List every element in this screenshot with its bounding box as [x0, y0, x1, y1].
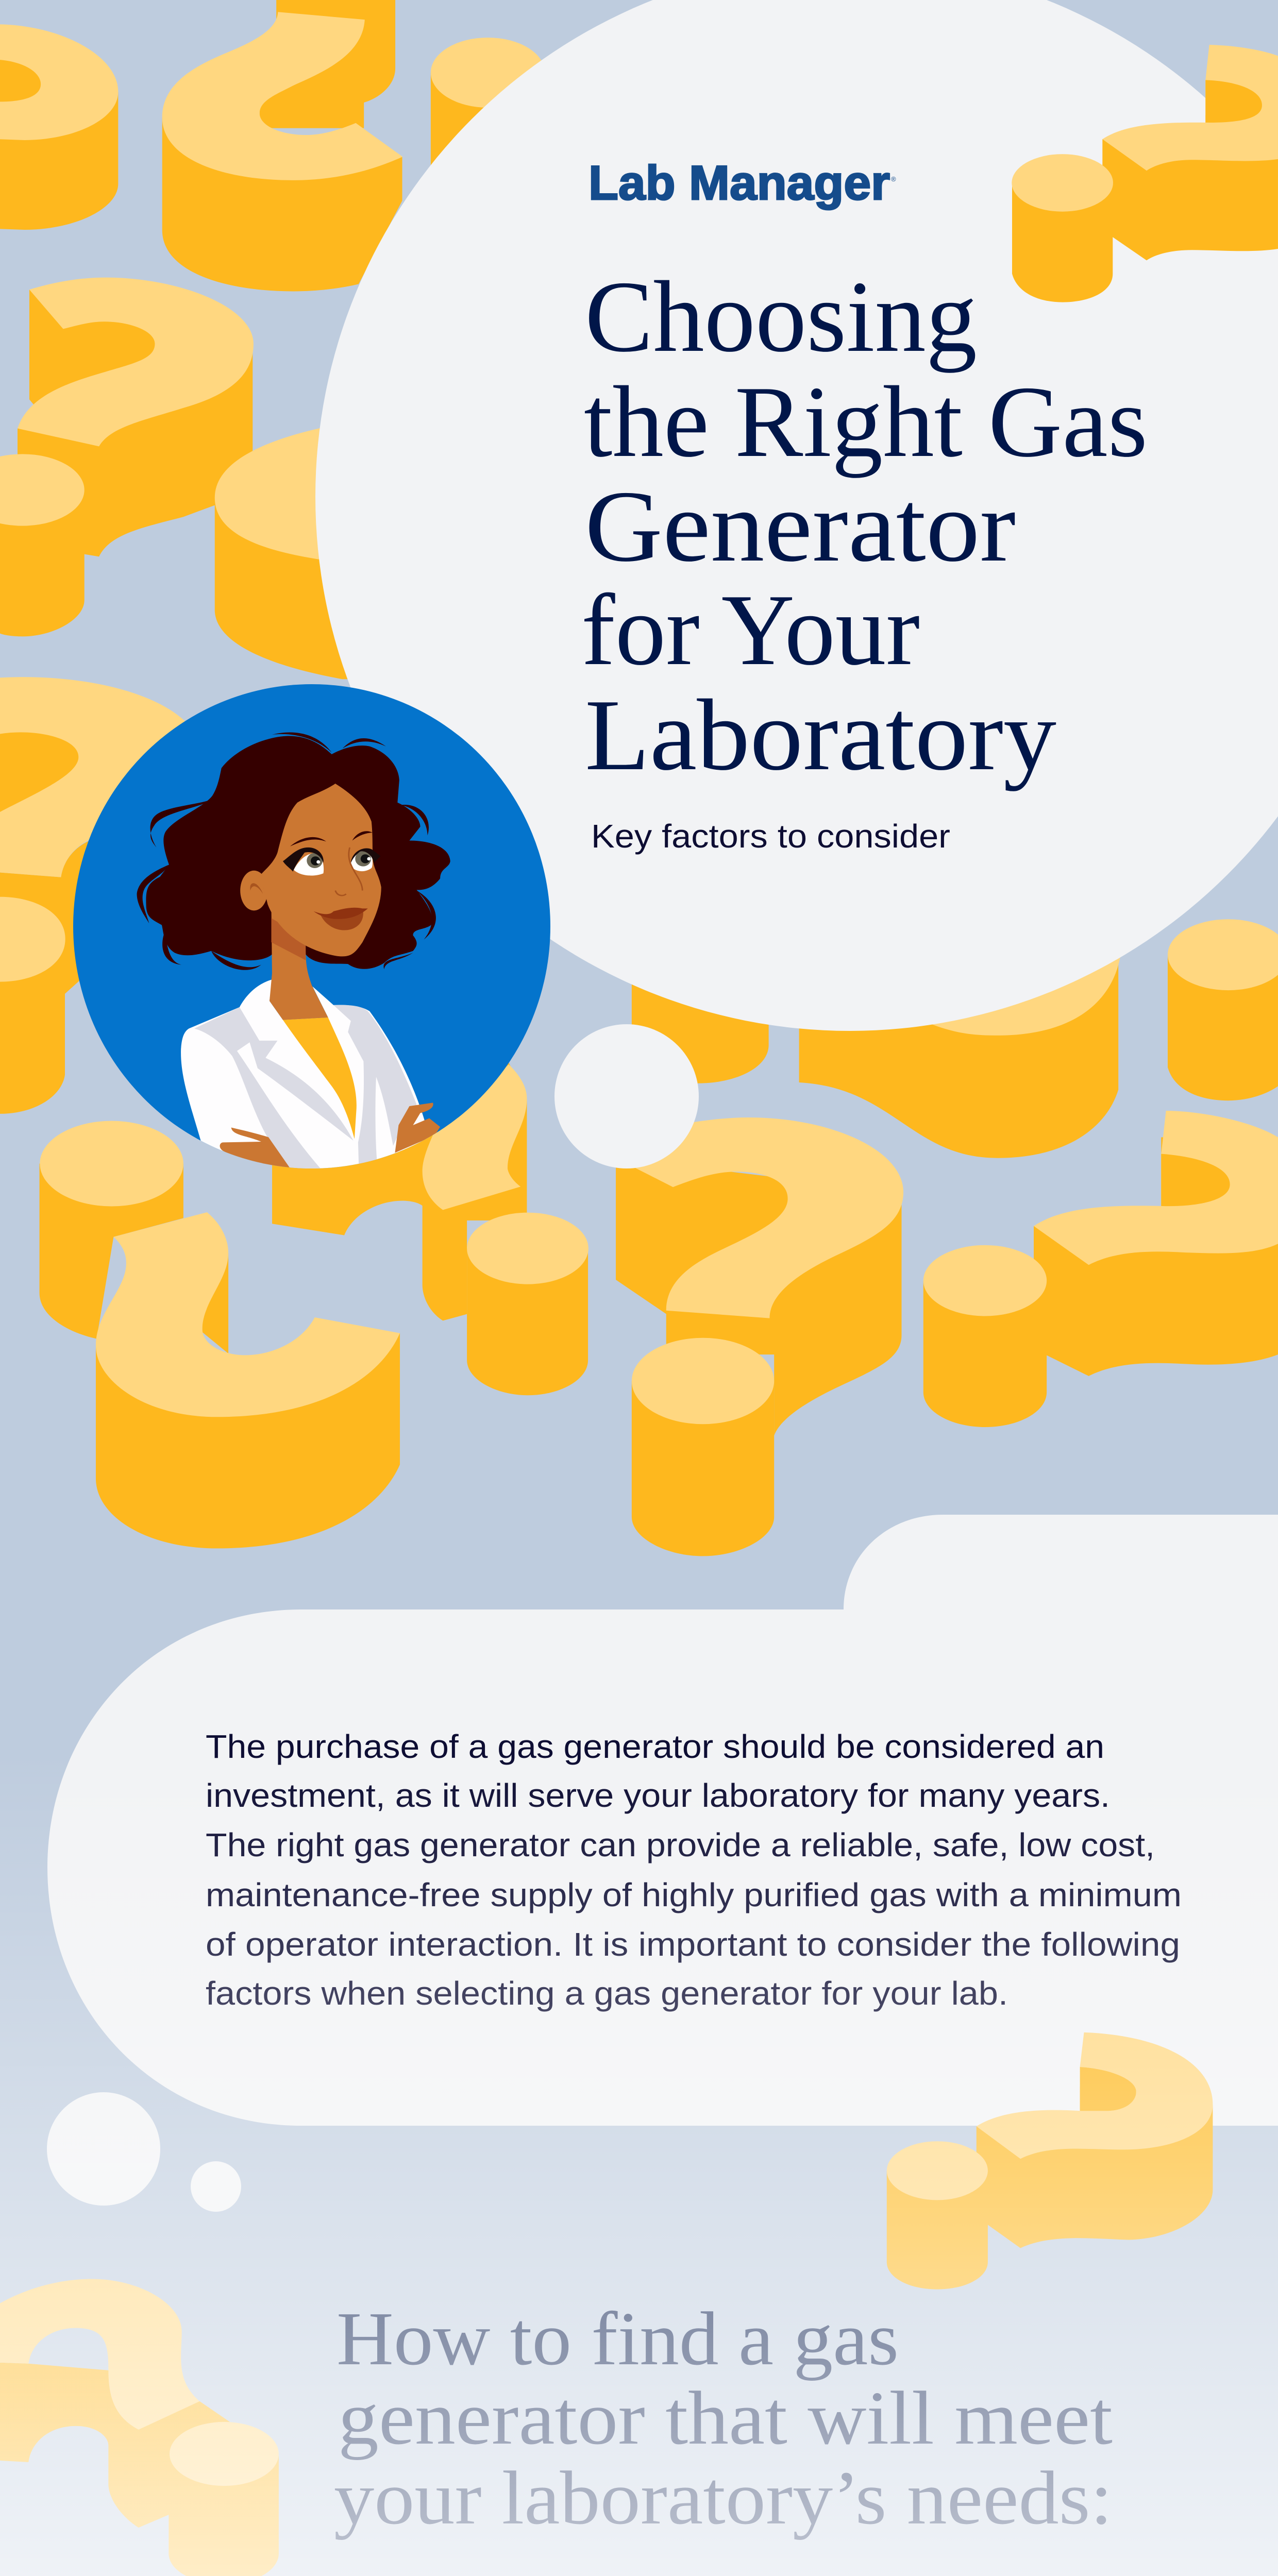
icon: small cylinder	[467, 1213, 588, 1395]
portrait circle	[73, 684, 550, 1177]
logo: ®	[891, 175, 896, 183]
thought bubble dots upper	[47, 2092, 241, 2212]
icon: small cylinder left	[0, 454, 85, 636]
intro text	[206, 1728, 1182, 2012]
icon: wave shaped mark behind bubble	[799, 953, 1120, 1158]
title: Laboratory	[585, 679, 1056, 791]
icon: right edge small cylinder	[923, 1245, 1047, 1427]
icon: top right question mark	[1012, 45, 1278, 302]
question marks: top left group	[0, 0, 570, 679]
panel: hero bubble	[315, 0, 1278, 1031]
title: for Your	[581, 573, 920, 686]
section heading: your laboratory’s needs:	[334, 2456, 1113, 2540]
title: Choosing	[585, 260, 977, 373]
intro text: factors when selecting a gas generator for your lab.	[206, 1975, 1008, 2012]
icon: cylinder behind bubble	[632, 953, 769, 1098]
section heading: How to find a gas	[337, 2297, 899, 2381]
icon: central question mark	[616, 1117, 903, 1436]
logo: Lab Manager	[588, 156, 890, 210]
icon: question mark under portrait	[272, 1063, 527, 1320]
icon: right edge cylinder	[1168, 919, 1278, 1100]
icon: partial question mark left edge	[0, 24, 118, 230]
decorative small bubble	[554, 1024, 699, 1168]
icon: right edge question mark	[1034, 1111, 1278, 1376]
section heading: generator that will meet	[338, 2376, 1113, 2461]
white fade overlay	[0, 1752, 1278, 2576]
panel: intro bubble	[47, 1515, 1278, 2126]
title: Generator	[585, 470, 1016, 583]
intro text: maintenance-free supply of highly purified gas with a minimum	[206, 1876, 1182, 1913]
intro text: investment, as it will serve your laboratory for many years.	[206, 1777, 1110, 1814]
intro text: The purchase of a gas generator should be considered an	[206, 1728, 1104, 1765]
subtitle: Key factors to consider	[591, 818, 950, 855]
icon: question mark left of heading	[0, 2279, 279, 2576]
icon: question mark left	[18, 278, 254, 556]
icon: cylinder top	[431, 38, 570, 256]
intro text: The right gas generator can provide a reliable, safe, low cost,	[206, 1826, 1155, 1863]
icon: question mark top centre	[162, 0, 402, 291]
icon: question mark over intro bubble	[887, 2032, 1213, 2290]
icon: large curved question mark	[96, 1212, 400, 1548]
question marks: lower left group	[40, 1063, 588, 1548]
icon: cylinder of central mark	[632, 1338, 774, 1556]
title: the Right Gas	[584, 365, 1148, 478]
section heading	[334, 2297, 1113, 2540]
illustration: scientist	[137, 733, 450, 1177]
intro text: of operator interaction. It is important to consider the following	[206, 1926, 1180, 1963]
icon: question mark behind portrait	[0, 677, 189, 1114]
icon: cylinder	[40, 1121, 183, 1339]
question marks: centre right group	[616, 953, 1120, 1556]
title	[581, 260, 1148, 791]
icon: large cylinder behind bubble	[215, 414, 408, 679]
